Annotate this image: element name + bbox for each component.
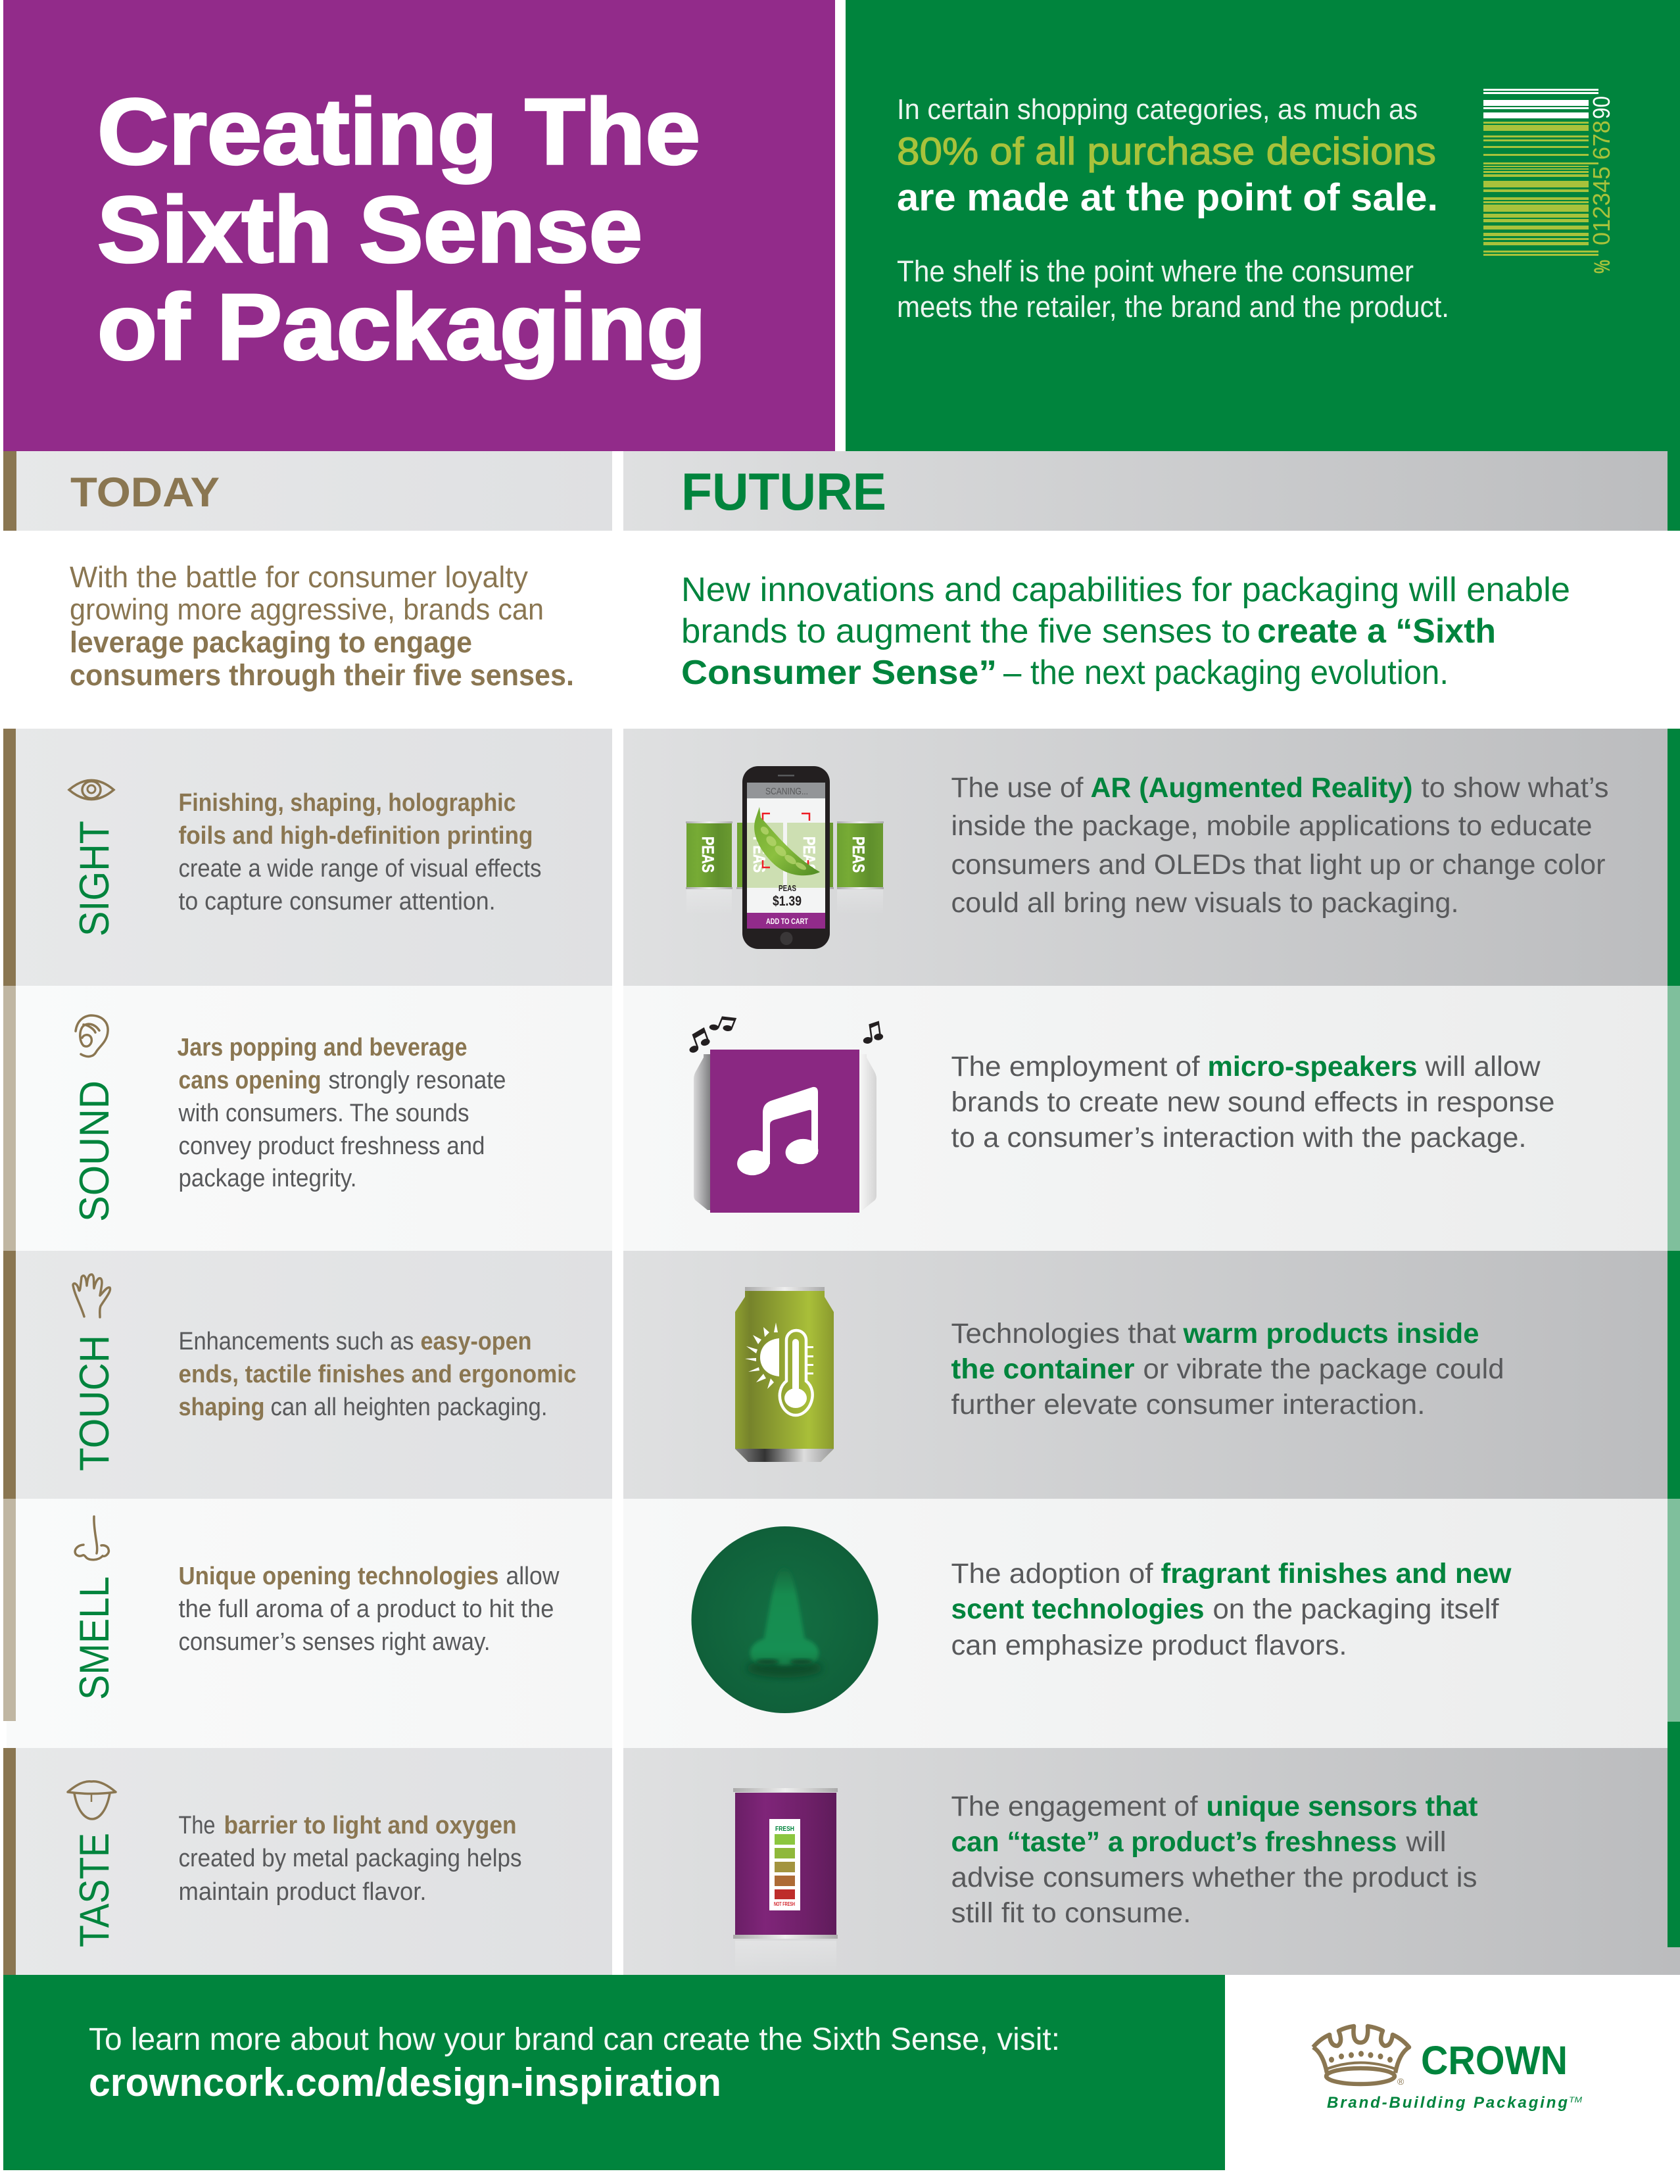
heading: future: FUTURE xyxy=(681,462,886,521)
text: shelf note: The shelf is the point where the consumer xyxy=(897,255,1414,288)
panel: taste future xyxy=(623,1722,1680,1975)
logo: crown: TM xyxy=(1569,2095,1582,2104)
icon: freshness can: NOT FRESH xyxy=(774,1901,795,1907)
text: sound today: package integrity. xyxy=(179,1165,356,1192)
text: future intro: – the next packaging evolution. xyxy=(1003,654,1449,692)
icon: warming can xyxy=(735,1287,834,1462)
text: smell future: on the packaging itself xyxy=(1212,1593,1500,1625)
text: taste today: barrier to light and oxygen xyxy=(224,1812,517,1839)
icon: barcode: 90 xyxy=(1588,96,1615,119)
text: today intro xyxy=(70,560,574,692)
icon: crown xyxy=(1313,2026,1409,2084)
text: sight today: Finishing, shaping, holographic xyxy=(179,789,516,817)
icon: peas cans and phone: PEAS xyxy=(849,837,867,873)
text: smell future: scent technologies xyxy=(951,1593,1205,1625)
text: today intro: leverage packaging to engage xyxy=(70,625,472,659)
panel: sight today xyxy=(3,729,612,986)
text: sight future: AR (Augmented Reality) xyxy=(1090,772,1412,804)
icon: nose xyxy=(75,1517,108,1560)
text: learn more: To learn more about how your brand can create the Sixth Sense, visit: xyxy=(89,2022,1060,2057)
icon: peas cans and phone: PEAS xyxy=(800,837,818,873)
text: sight today xyxy=(179,789,542,915)
panel: footer call to action xyxy=(3,1975,1225,2170)
text: taste future: advise consumers whether the product is xyxy=(951,1862,1477,1893)
text: crown wordmark: CROWN xyxy=(1421,2038,1568,2083)
title: Sixth Sense xyxy=(97,178,642,282)
text: sight future: inside the package, mobile applications to educate xyxy=(951,810,1593,842)
text: smell today: the full aroma of a product to hit the xyxy=(179,1595,554,1623)
icon: barcode: 012345 678 xyxy=(1588,120,1615,245)
text: sound future: brands to create new sound effects in response xyxy=(951,1086,1554,1118)
panel: touch future xyxy=(623,1251,1680,1499)
icon: barcode: % xyxy=(1590,260,1615,274)
text: smell future: fragrant finishes and new xyxy=(1161,1558,1512,1589)
icon: peas cans and phone: ADD TO CART xyxy=(766,917,809,926)
text: smell future: The adoption of xyxy=(951,1558,1154,1589)
heading: today: TODAY xyxy=(70,470,220,516)
text: intro line: In certain shopping categories, as much as xyxy=(897,93,1418,126)
text: sound today: convey product freshness and xyxy=(179,1132,485,1160)
text: today intro: consumers through their five senses. xyxy=(70,658,574,692)
text: shelf note: meets the retailer, the brand and the product. xyxy=(897,290,1449,324)
icon: peas cans and phone: $1.39 xyxy=(773,894,802,909)
text: sight future: consumers and OLEDs that light up or change color xyxy=(951,849,1606,881)
icon: music notes xyxy=(684,1013,884,1054)
text: sight today: to capture consumer attention. xyxy=(179,888,496,915)
text: sound today: with consumers. The sounds xyxy=(178,1100,469,1127)
label: sound: SOUND xyxy=(72,1080,118,1222)
text: future intro: brands to augment the five senses to xyxy=(681,612,1251,650)
text: smell today: allow xyxy=(506,1563,560,1590)
text: touch future: Technologies that xyxy=(951,1318,1176,1349)
icon: eye xyxy=(69,780,114,800)
panel: today header xyxy=(3,451,612,531)
text: sound future: micro-speakers xyxy=(1207,1051,1418,1082)
text: taste today xyxy=(179,1812,522,1906)
text: touch future: the container xyxy=(951,1353,1135,1385)
text: sight today: foils and high-definition printing xyxy=(179,822,533,850)
text: sound today: strongly resonate xyxy=(329,1067,506,1094)
panel: touch today xyxy=(3,1251,612,1499)
text: taste future: will xyxy=(1405,1826,1447,1858)
text: smell today: consumer’s senses right away. xyxy=(179,1628,491,1656)
icon: peas cans and phone: PEAS xyxy=(698,837,717,873)
logo: crown: ® xyxy=(1397,2076,1404,2087)
label: taste: TASTE xyxy=(72,1833,118,1947)
text: shelf note xyxy=(897,255,1449,324)
panel: future header xyxy=(623,451,1680,531)
text: today intro: growing more aggressive, brands can xyxy=(70,593,544,626)
text: sight future: could all bring new visuals to packaging. xyxy=(951,887,1458,919)
text: taste future: unique sensors that xyxy=(1206,1791,1478,1822)
panel: point of sale statistic xyxy=(846,0,1680,451)
panel: sound future xyxy=(623,986,1680,1251)
text: future intro: create a “Sixth xyxy=(1257,612,1496,650)
text: sound today xyxy=(178,1034,506,1192)
icon: peas cans and phone: SCANING... xyxy=(765,786,808,797)
text: touch future xyxy=(951,1318,1504,1420)
text: point of sale: are made at the point of sale. xyxy=(897,176,1438,219)
text: 80% statistic: 80% of all purchase decisions xyxy=(897,130,1436,173)
panel: taste today xyxy=(3,1748,612,1975)
title: Creating The xyxy=(97,80,700,184)
text: sound future: will allow xyxy=(1424,1051,1541,1082)
text: taste future: The engagement of xyxy=(951,1791,1199,1822)
icon: freshness can: FRESH xyxy=(775,1826,794,1833)
text: future intro: Consumer Sense” xyxy=(681,654,997,692)
logo: crown xyxy=(1313,2026,1582,2112)
panel: title xyxy=(3,0,835,451)
title: of Packaging xyxy=(97,275,706,379)
text: sound future: The employment of xyxy=(951,1051,1201,1082)
text: taste future: can “taste” a product’s freshness xyxy=(951,1826,1397,1858)
icon: peas cans and phone: PEAS xyxy=(779,883,796,893)
text: touch future: or vibrate the package could xyxy=(1143,1353,1504,1385)
text: taste future xyxy=(951,1791,1478,1929)
label: touch: TOUCH xyxy=(72,1335,118,1471)
text: future intro: New innovations and capabilities for packaging will enable xyxy=(681,571,1570,609)
icon: freshness can xyxy=(733,1788,838,1972)
text: sound today: Jars popping and beverage xyxy=(178,1034,467,1061)
text: touch today: easy-open xyxy=(421,1328,531,1355)
label: smell: SMELL xyxy=(72,1576,118,1700)
text: touch future: further elevate consumer interaction. xyxy=(951,1389,1426,1420)
text: taste today: created by metal packaging helps xyxy=(179,1845,522,1872)
text: sound future: to a consumer’s interaction with the package. xyxy=(951,1122,1527,1153)
text: smell future: can emphasize product flavors. xyxy=(951,1630,1347,1661)
title xyxy=(97,80,706,379)
text: taste today: The xyxy=(179,1812,216,1839)
panel: smell today xyxy=(3,1499,612,1748)
text: today intro: With the battle for consumer loyalty xyxy=(70,560,528,594)
text: touch today: can all heighten packaging. xyxy=(271,1394,547,1421)
icon: ear xyxy=(76,1015,108,1057)
text: website url: crowncork.com/design-inspiration xyxy=(89,2060,721,2104)
text: smell today: Unique opening technologies xyxy=(179,1563,498,1590)
text: touch future: warm products inside xyxy=(1182,1318,1479,1349)
text: taste today: maintain product flavor. xyxy=(179,1878,426,1906)
icon: peas cans and phone: PEAS xyxy=(750,837,768,873)
text: sight today: create a wide range of visual effects xyxy=(179,855,542,883)
panel: smell future xyxy=(623,1499,1680,1748)
panel: sound today xyxy=(3,986,612,1251)
text: touch today: ends, tactile finishes and ergonomic xyxy=(179,1361,576,1388)
panel: sight future xyxy=(623,729,1680,986)
text: touch today: shaping xyxy=(179,1394,264,1421)
icon: mouth xyxy=(68,1782,116,1819)
text: future intro xyxy=(681,571,1570,692)
text: sight future: The use of xyxy=(951,772,1084,804)
icon: hand xyxy=(73,1274,110,1317)
text: smell today xyxy=(179,1563,560,1656)
icon: silver can with music label xyxy=(694,1050,876,1213)
text: touch today xyxy=(179,1328,576,1421)
text: sight future: to show what’s xyxy=(1422,772,1608,804)
text: sound future xyxy=(951,1051,1554,1153)
text: tagline: Brand-Building Packaging xyxy=(1327,2094,1568,2112)
text: smell future xyxy=(951,1558,1512,1661)
text: sound today: cans opening xyxy=(179,1067,321,1094)
text: sight future xyxy=(951,772,1608,919)
icon: barcode xyxy=(1483,89,1615,274)
icon: green nose xyxy=(692,1526,878,1713)
icon: peas cans and phone xyxy=(686,766,884,949)
label: sight: SIGHT xyxy=(72,821,118,936)
text: taste future: still fit to consume. xyxy=(951,1897,1191,1929)
text: touch today: Enhancements such as xyxy=(179,1328,414,1355)
